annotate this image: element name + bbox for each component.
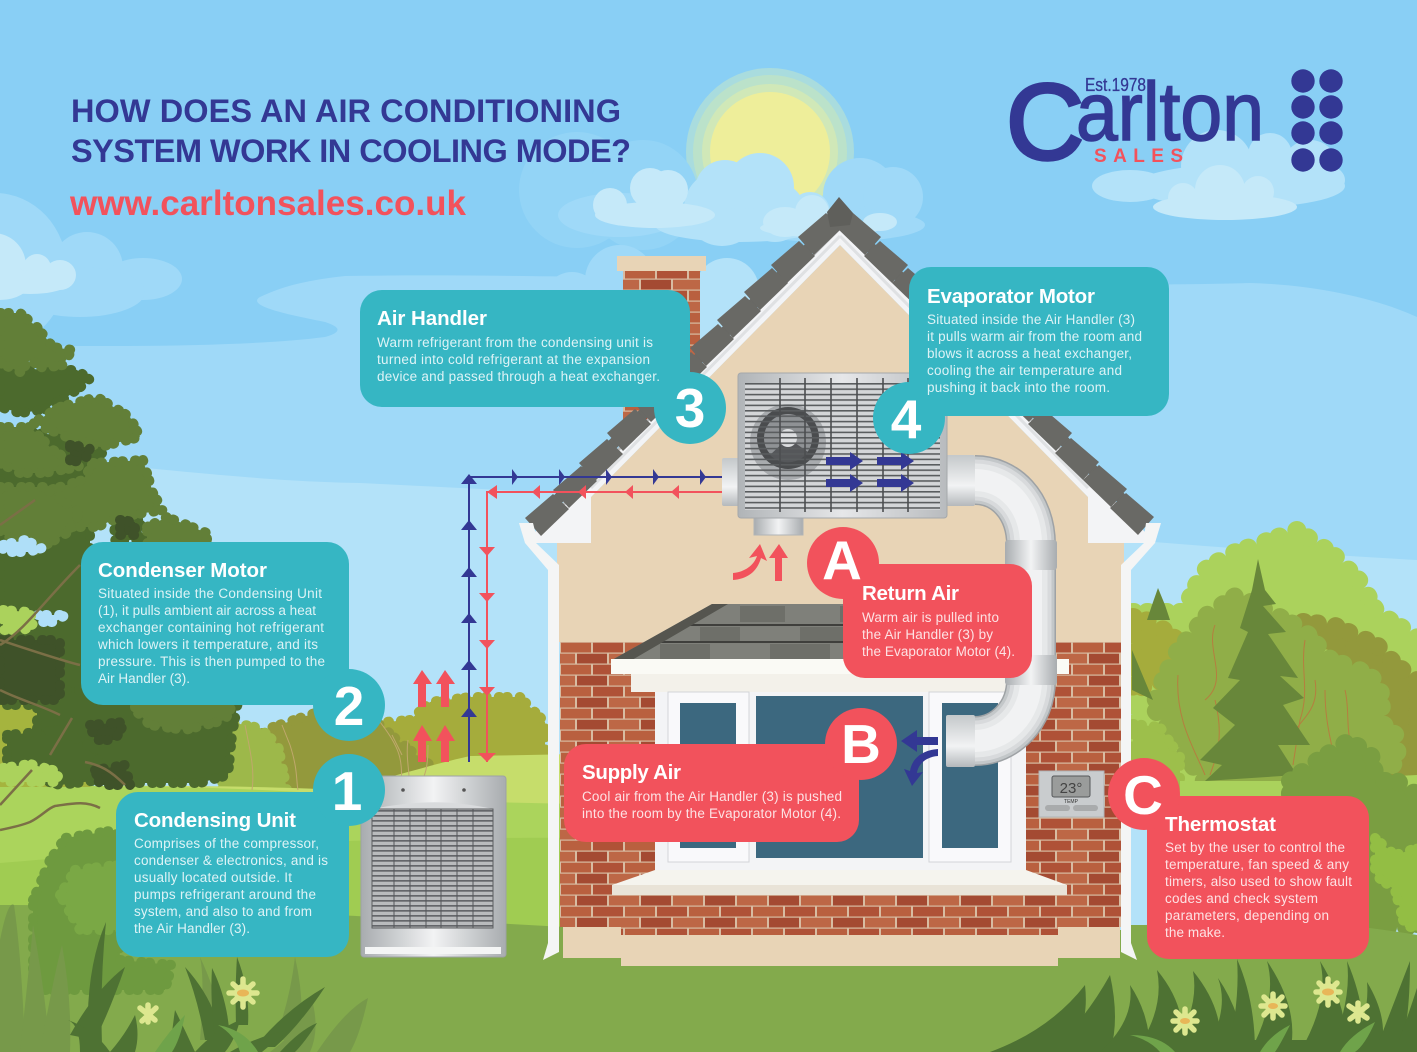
panel: condenser motor: (1), it pulls ambient air across a heat [98, 603, 316, 618]
roof [525, 197, 1154, 543]
panel: condensing unit: Comprises of the compressor, [134, 836, 319, 851]
panel: return air: the Air Handler (3) by [862, 627, 993, 642]
centre plinth [621, 935, 1058, 966]
cloud: centre behind roof [519, 132, 925, 250]
cloud: behind chimney [540, 245, 759, 343]
plinths [563, 927, 1120, 958]
panel: air handler: turned into cold refrigerant at the expansion [377, 352, 650, 367]
panel: condenser motor: Air Handler (3). [98, 671, 190, 686]
bay roof [612, 604, 1040, 660]
logo: Est.1978 [1085, 75, 1146, 95]
panel: condensing unit: system, and also to and from [134, 904, 312, 919]
lime gaps in foliage [3, 610, 60, 782]
darkest foliage [0, 445, 135, 785]
cloud: under logo [1092, 130, 1345, 220]
panel: evaporator motor: blows it across a heat exchanger, [927, 346, 1132, 361]
panel: condenser motor: Condenser Motor [98, 559, 267, 582]
panel: thermostat: Set by the user to control the [1165, 840, 1345, 855]
panel: air handler: Air Handler [377, 307, 487, 330]
supply air arrows [901, 730, 938, 786]
house [519, 197, 1161, 966]
tile base band [535, 217, 1145, 522]
foreground grass right [990, 959, 1417, 1052]
window [655, 692, 1026, 870]
panel: thermostat: temperature, fan speed & any [1165, 857, 1349, 872]
branches [0, 500, 125, 830]
airflow arrows [826, 452, 914, 492]
gable wall [557, 245, 1124, 642]
thermostat [1039, 771, 1104, 817]
panel: condensing unit: pumps refrigerant around the [134, 887, 316, 902]
low bush [33, 830, 172, 990]
panel: thermostat: C [1123, 764, 1163, 826]
panel: supply air: into the room by the Evaporator Motor (4). [582, 806, 841, 821]
panel: evaporator motor: pushing it back into the room. [927, 380, 1110, 395]
title [71, 93, 631, 169]
panel: supply air: Supply Air [582, 761, 681, 784]
ridge cap [827, 197, 853, 227]
dark foliage [0, 363, 240, 785]
fan [750, 404, 826, 480]
panel: condenser motor [81, 542, 385, 741]
title: HOW DOES AN AIR CONDITIONING [71, 93, 621, 129]
logo: SALES [1094, 146, 1183, 167]
panel: condenser motor: 2 [334, 675, 364, 737]
air duct [946, 455, 1057, 767]
fascia [533, 227, 1145, 543]
panel: evaporator motor: Evaporator Motor [927, 285, 1095, 308]
thermostat: 23° [1060, 780, 1082, 797]
flowers [140, 979, 1367, 1033]
panel: supply air: B [841, 713, 881, 775]
panel: evaporator motor: Situated inside the Air Handler (3) [927, 312, 1135, 327]
panel: supply air: Cool air from the Air Handler (3) is pushed [582, 789, 842, 804]
panel: condensing unit: 1 [332, 760, 362, 822]
panel: evaporator motor: 4 [891, 388, 922, 450]
mid foliage [0, 313, 240, 730]
tiles right [837, 213, 1154, 535]
panel: supply air [564, 708, 897, 842]
cloud: left [0, 193, 182, 347]
panel: condenser motor: Situated inside the Condensing Unit [98, 586, 322, 601]
background hills and ground [0, 697, 620, 1052]
panel: evaporator motor: cooling the air temperature and [927, 363, 1122, 378]
refrigerant lines [461, 469, 722, 762]
panel: thermostat: parameters, depending on [1165, 908, 1329, 923]
panel: thermostat: codes and check system [1165, 891, 1318, 906]
panel: condensing unit: usually located outside. It [134, 870, 292, 885]
panel: condensing unit: condenser & electronics, and is [134, 853, 328, 868]
panel: return air [807, 527, 1032, 678]
panel: air handler: device and passed through a heat exchanger. [377, 369, 660, 384]
logo: C [1006, 61, 1084, 182]
tiles left [525, 213, 842, 536]
panel: return air: the Evaporator Motor (4). [862, 644, 1015, 659]
sun [686, 68, 854, 236]
panel: condensing unit [116, 754, 385, 957]
panel: thermostat [1108, 758, 1369, 959]
gutters and downpipes [519, 523, 1161, 960]
window sill [612, 870, 1067, 895]
panel: thermostat: timers, also used to show fault [1165, 874, 1352, 889]
website url: www.carltonsales.co.uk [69, 184, 467, 223]
panel: condensing unit: the Air Handler (3). [134, 921, 250, 936]
lower brick [621, 895, 1058, 935]
right trees [620, 530, 1417, 1052]
panel: air handler: Warm refrigerant from the condensing unit is [377, 335, 653, 350]
tile shadow [538, 228, 1142, 530]
title: SYSTEM WORK IN COOLING MODE? [71, 133, 631, 169]
panel: air handler [360, 290, 726, 444]
chimney [617, 256, 706, 428]
panel: evaporator motor: it pulls warm air from the room and [927, 329, 1142, 344]
panel: thermostat: the make. [1165, 925, 1225, 940]
air handler unit [722, 373, 947, 535]
brick wall [560, 642, 1121, 927]
foreground grass left [0, 904, 368, 1052]
panel: condenser motor: exchanger containing hot refrigerant [98, 620, 324, 635]
panel: return air: Warm air is pulled into [862, 610, 999, 625]
thermostat: TEMP [1064, 799, 1079, 805]
sky gaps in foliage [3, 540, 65, 622]
panel: condenser motor: which lowers it temperature, and its [97, 637, 318, 652]
panel: evaporator motor [873, 267, 1169, 454]
clouds [0, 130, 1345, 347]
bay fascia [611, 659, 1069, 692]
panel: condenser motor: pressure. This is then pumped to the [98, 654, 325, 669]
panel: air handler: 3 [675, 377, 705, 439]
left tree [0, 313, 240, 990]
heat arrows above condensing unit [413, 670, 455, 762]
logo dots [1291, 69, 1343, 172]
panel: return air: Return Air [862, 582, 959, 605]
lime foliage behind tree [0, 703, 90, 787]
return air arrows [733, 544, 788, 581]
condensing unit [361, 776, 506, 957]
logo: arlton [1076, 65, 1264, 158]
panel: condensing unit: Condensing Unit [134, 809, 296, 832]
panel: return air: A [822, 529, 862, 591]
logo [1006, 61, 1343, 182]
panel: thermostat: Thermostat [1165, 813, 1276, 836]
